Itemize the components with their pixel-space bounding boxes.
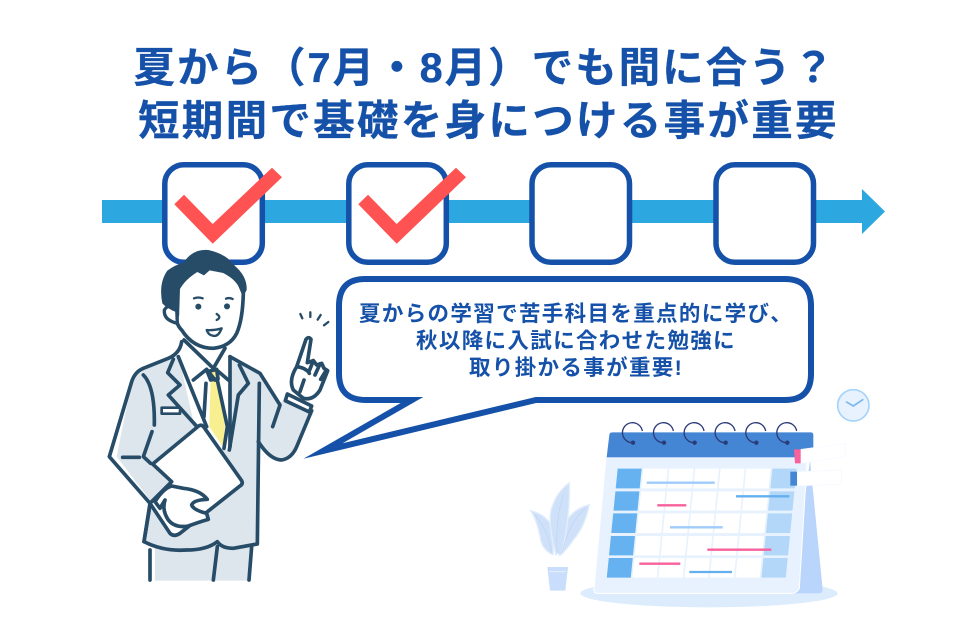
clock	[838, 390, 869, 421]
plant	[531, 483, 589, 591]
holding hand	[155, 486, 208, 527]
head	[177, 267, 243, 348]
businessman illustration	[109, 250, 328, 581]
shirt	[179, 340, 229, 450]
raised hand	[285, 338, 328, 412]
calendar stand	[792, 460, 823, 593]
check mark 1	[174, 168, 282, 244]
check mark 2	[358, 168, 466, 244]
speech bubble	[323, 279, 811, 451]
speech bubble text: 取り掛かる事が重要!	[469, 355, 683, 380]
title: 短期間で基礎を身につける事が重要	[138, 97, 839, 144]
tie	[207, 369, 225, 447]
tablet	[150, 425, 242, 535]
calendar grid	[607, 469, 797, 578]
checkbox 1	[165, 165, 262, 262]
checkbox 3	[532, 165, 630, 262]
speech bubble text: 夏からの学習で苦手科目を重点的に学び、	[359, 302, 793, 326]
calendar illustration	[531, 390, 869, 607]
calendar rings	[622, 423, 797, 445]
emphasis ticks	[300, 312, 328, 325]
face features	[194, 297, 233, 336]
schedule bars	[639, 483, 789, 572]
speech bubble text: 秋以降に入試に合わせた勉強に	[416, 329, 736, 353]
breast pocket	[162, 408, 180, 414]
eyes	[195, 304, 201, 310]
speech bubble text	[359, 302, 793, 380]
calendar shadow	[580, 579, 838, 607]
checkbox 2	[349, 165, 446, 262]
timeline checkboxes	[165, 165, 814, 262]
sticky notes	[790, 443, 845, 486]
timeline arrow	[102, 189, 885, 234]
title: 夏から（7月・8月）でも間に合う？	[134, 44, 836, 91]
checkbox 4	[716, 165, 814, 262]
hair	[161, 250, 247, 313]
title	[134, 44, 839, 144]
suit	[117, 355, 312, 581]
suit outline	[109, 340, 312, 580]
calendar header	[607, 432, 813, 457]
ear	[164, 306, 177, 323]
calendar body	[594, 457, 807, 593]
